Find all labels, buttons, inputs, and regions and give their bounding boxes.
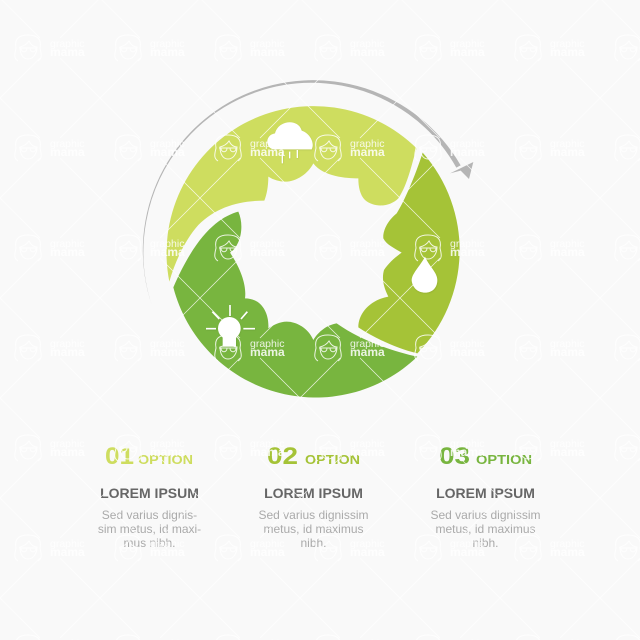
body text — [258, 508, 369, 550]
heading: 02 option — [267, 443, 360, 470]
subheading: LOREM IPSUM — [100, 485, 199, 501]
option 03 text column — [430, 443, 541, 550]
heading: 01 option: OPTION — [138, 452, 193, 467]
circular diagram — [143, 80, 473, 398]
heading: 01 option — [105, 443, 193, 470]
heading: 03 option — [439, 443, 532, 470]
heading: 03 option: OPTION — [476, 452, 532, 467]
heading: 01 option: 01 — [105, 443, 134, 470]
subheading: LOREM IPSUM — [264, 485, 363, 501]
body text: mus nibh. — [123, 536, 176, 550]
icon: light bulb — [206, 305, 255, 347]
body text: Sed varius dignis- — [102, 508, 197, 522]
body text — [98, 508, 201, 550]
subheading: LOREM IPSUM — [436, 485, 535, 501]
segment: light green option 01 — [167, 106, 417, 282]
segment: dark green option 03 — [173, 212, 417, 398]
heading: 03 option: 03 — [439, 443, 470, 470]
heading: 02 option: 02 — [267, 443, 298, 470]
icon: cloud with rain — [267, 122, 313, 163]
body text: nibh. — [472, 536, 499, 550]
body text: nibh. — [300, 536, 327, 550]
body text: metus, id maximus — [435, 522, 536, 536]
arrow: clockwise gray — [143, 80, 473, 306]
body text — [430, 508, 541, 550]
segment: mid green option 02 — [358, 153, 460, 353]
body text: sim metus, id maxi- — [98, 522, 201, 536]
option 02 text column — [258, 443, 369, 550]
body text: metus, id maximus — [263, 522, 364, 536]
body text: Sed varius dignissim — [258, 508, 369, 522]
option 01 text column — [98, 443, 201, 550]
icon: water drop — [412, 257, 437, 293]
body text: Sed varius dignissim — [430, 508, 541, 522]
heading: 02 option: OPTION — [305, 452, 360, 467]
